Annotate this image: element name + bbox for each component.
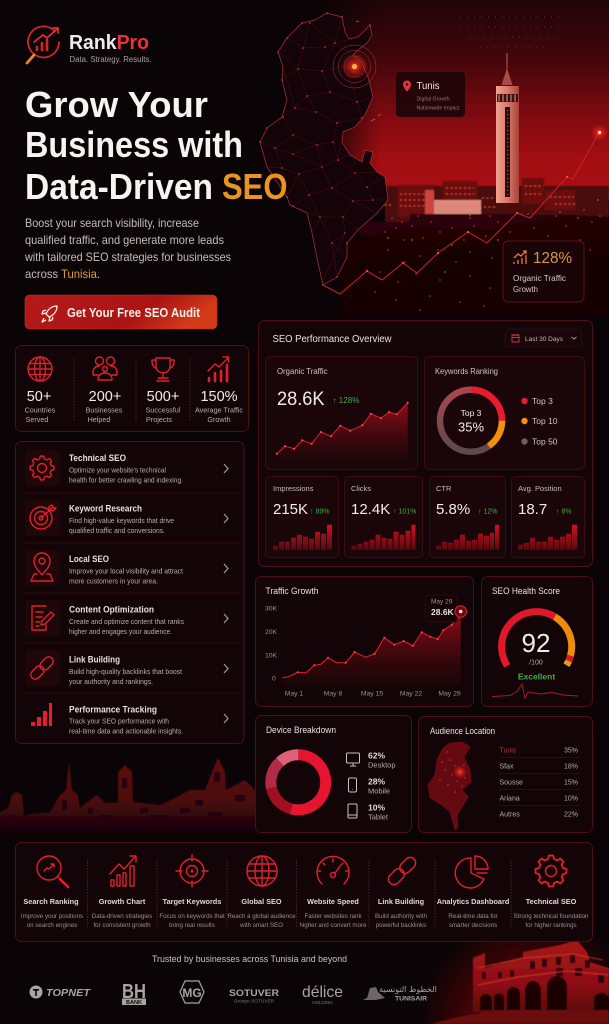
table: cities <box>499 748 579 818</box>
date range dropdown: Last 30 Days <box>525 336 564 343</box>
card: organic traffic: 28.6K <box>277 389 325 410</box>
logo: Tunisair: TUNISAIR <box>395 996 427 1002</box>
table: cities: Autres <box>500 812 520 818</box>
service: Content Optimization <box>25 600 228 636</box>
stat: countries served: Served <box>26 415 48 424</box>
intro paragraph: across Tunisia. <box>25 267 100 281</box>
stat: businesses helped: Businesses <box>86 406 123 414</box>
card: organic traffic <box>266 356 418 470</box>
callout: 128% organic traffic growth: Organic Traffic <box>513 274 566 283</box>
item: technical SEO: for higher rankings <box>525 922 577 929</box>
panel: SEO health score: Excellent <box>518 672 555 682</box>
logo: MG: MG <box>182 986 202 1000</box>
stat: average traffic growth: 150% <box>200 389 238 405</box>
card: keywords ranking: Top 3 <box>461 408 482 418</box>
item: global SEO: with smart SEO <box>239 922 283 929</box>
pulse line <box>492 684 578 698</box>
callout: Tunis: Nationwide Impact <box>416 106 460 112</box>
marker: latest point <box>455 606 467 617</box>
table: cities: 15% <box>564 780 578 786</box>
hero image: Tunis skyline at night <box>320 0 609 320</box>
device values: 10% <box>368 802 385 812</box>
service: Keyword Research: Keyword Research <box>69 504 142 514</box>
logo: Data. Strategy. Results. <box>70 55 152 64</box>
item: website speed <box>299 856 367 929</box>
logo: délice: délice <box>302 984 343 1001</box>
legend: keywords <box>521 396 558 446</box>
table: cities: Sousse <box>500 780 523 786</box>
card: impressions: ↑ 89% <box>310 508 329 516</box>
item: website speed: Website Speed <box>307 897 359 906</box>
item: technical SEO: Strong technical foundation <box>514 913 589 920</box>
device values: 28% <box>368 776 385 786</box>
callout: 128% organic traffic growth <box>503 241 584 302</box>
legend: keywords: Top 50 <box>532 436 558 446</box>
button: Get Your Free SEO Audit: Get Your Free SEO Audit <box>67 306 201 320</box>
table: cities: Tunis <box>500 748 517 754</box>
axis labels: 20K <box>265 629 278 636</box>
item: growth chart <box>92 856 152 929</box>
service: Link Building: your authority and rankings. <box>69 677 153 686</box>
item: website speed: Faster websites rank <box>304 913 362 920</box>
item: search ranking: on search engines <box>27 922 77 929</box>
card: clicks: ↑ 101% <box>393 508 416 516</box>
stat: successful projects: Projects <box>146 415 172 424</box>
axis labels: May 22 <box>400 690 422 698</box>
card: keywords ranking: 35% <box>458 420 484 434</box>
stat: average traffic growth: Average Traffic <box>195 406 243 414</box>
stat: countries served: Countries <box>25 406 56 414</box>
service: Technical SEO <box>25 450 228 486</box>
item: analytics dashboard: Analytics Dashboard <box>437 897 509 906</box>
card: impressions: Impressions <box>273 484 314 493</box>
item: link building: Link Building <box>378 897 424 906</box>
item: analytics dashboard: smarter decisions <box>449 922 497 929</box>
card: CTR <box>430 476 506 558</box>
card: CTR: CTR <box>436 484 452 493</box>
panel: SEO capabilities strip <box>16 842 592 942</box>
item: technical SEO: Technical SEO <box>526 897 577 906</box>
panel: SEO performance overview: SEO Performance Overview <box>272 334 392 345</box>
axis labels: May 29 <box>438 690 461 698</box>
item: analytics dashboard <box>437 856 509 929</box>
item: analytics dashboard: Real-time data for <box>448 913 498 920</box>
callout: 128% organic traffic growth: Growth <box>513 285 538 294</box>
panel: SEO health score: SEO Health Score <box>492 586 560 597</box>
item: link building <box>375 855 428 929</box>
date range dropdown <box>505 329 582 347</box>
logo: TOPNET <box>30 986 92 999</box>
Tunis location beacon <box>333 45 376 88</box>
card: keywords ranking <box>424 356 584 470</box>
service: Content Optimization: higher and engages your audience. <box>69 627 172 636</box>
table: cities: 35% <box>564 748 578 754</box>
card: clicks: 12.4K <box>351 501 390 518</box>
panel: key stats <box>16 346 248 432</box>
table: cities: 18% <box>564 764 578 770</box>
service: Local SEO: Improve your local visibility and attract <box>69 566 183 576</box>
logo: SOTUVER <box>229 988 279 1004</box>
stat: successful projects <box>146 358 181 424</box>
service: Performance Tracking <box>31 703 228 736</box>
growth line across the city <box>323 124 608 294</box>
axis labels: May 8 <box>324 690 342 698</box>
donut chart: devices <box>271 755 326 810</box>
panel: SEO performance overview <box>258 320 592 566</box>
service: Keyword Research: Find high-value keywords that drive <box>69 516 174 525</box>
service: Local SEO <box>25 550 228 586</box>
card: organic traffic: Organic Traffic <box>277 366 328 376</box>
item: link building: powerful backlinks <box>376 922 426 929</box>
panel: audience location <box>418 716 592 832</box>
intro paragraph: with tailored SEO strategies for businesses <box>24 250 231 264</box>
item: website speed: higher and convert more <box>299 922 367 929</box>
service: Content Optimization: Create and optimize content that ranks <box>69 617 184 626</box>
icons: devices <box>346 753 360 818</box>
stat: businesses helped: Helped <box>88 415 110 424</box>
service: Performance Tracking: real-time data and actionable insights. <box>69 726 183 736</box>
card: average position: ↑ 8% <box>556 508 572 516</box>
card: keywords ranking: Keywords Ranking <box>435 366 498 376</box>
service: Technical SEO: Optimize your website's technical <box>69 466 166 474</box>
title: SEO <box>222 166 288 207</box>
logo: TOPNET: TOPNET <box>46 987 92 999</box>
decorative: old town silhouette <box>0 758 255 836</box>
city lights <box>375 210 600 310</box>
card: impressions: 215K <box>273 501 308 518</box>
item: link building: Build authority with <box>375 913 428 920</box>
card: organic traffic: ↑ 128% <box>332 396 360 405</box>
service: Local SEO: Local SEO <box>69 554 109 565</box>
item: search ranking <box>21 856 83 929</box>
stat: businesses helped: 200+ <box>89 389 121 405</box>
axis labels: May 1 <box>285 690 303 698</box>
gauge <box>502 612 572 666</box>
service: Link Building: Build high-quality backlinks that boost <box>69 667 182 676</box>
device values: Mobile <box>368 786 390 796</box>
panel: traffic growth: Traffic Growth <box>266 586 318 597</box>
logo: MG <box>180 981 204 1003</box>
stat: average traffic growth: Growth <box>207 415 231 424</box>
item: search ranking: Improve your positions <box>21 913 83 920</box>
button: Get Your Free SEO Audit <box>25 295 217 329</box>
item: global SEO: Reach a global audience <box>227 913 296 920</box>
table: cities: Sfax <box>500 764 514 770</box>
item: technical SEO <box>514 856 589 929</box>
area chart: organic traffic <box>277 403 408 458</box>
donut chart: keywords <box>440 390 502 452</box>
card: average position: 18.7 <box>518 501 547 518</box>
panel: SEO health score: /100 <box>529 660 543 666</box>
service: Performance Tracking: Performance Tracking <box>69 704 157 716</box>
icon: magnifier with growth bars <box>27 26 59 63</box>
logo: RankPro <box>69 32 149 54</box>
service: Technical SEO: health for better crawling and indexing. <box>69 476 183 484</box>
axis labels: 10K <box>265 652 278 660</box>
title: Business with <box>25 124 243 165</box>
stat: successful projects: 500+ <box>147 389 179 405</box>
card: impressions <box>266 476 338 558</box>
service: Link Building <box>25 650 228 686</box>
panel: device breakdown <box>256 716 412 832</box>
skyline buildings <box>385 186 609 240</box>
stat: businesses helped <box>86 357 123 424</box>
stat: successful projects: Successful <box>146 406 181 414</box>
title: Grow Your <box>25 84 208 125</box>
tooltip: May 29 <box>425 595 457 622</box>
device values <box>368 750 396 822</box>
device values: Tablet <box>368 812 389 822</box>
panel: traffic growth <box>256 576 474 706</box>
table: cities: 10% <box>564 796 578 802</box>
card: average position <box>512 476 584 558</box>
callout: Tunis: Digital Growth <box>416 96 450 102</box>
item: global SEO <box>227 856 296 929</box>
axis labels: 30K <box>265 606 278 612</box>
callout: 128% organic traffic growth: 128% <box>533 250 572 267</box>
panel: services <box>16 442 244 744</box>
item: growth chart: Growth Chart <box>99 897 146 906</box>
logo: SOTUVER: SOTUVER <box>229 988 279 999</box>
item: target keywords: Target Keywords <box>163 897 221 906</box>
item: target keywords: bring real results <box>169 922 215 929</box>
item: global SEO: Global SEO <box>241 897 282 906</box>
panel: device breakdown: Device Breakdown <box>266 725 336 736</box>
logo: Tunisair <box>363 985 437 1002</box>
legend: keywords: Top 10 <box>532 416 558 426</box>
logo: BH Bank: BH <box>122 981 146 1003</box>
card: clicks: Clicks <box>351 484 371 493</box>
map: Tunisia network <box>260 13 388 285</box>
service: Technical SEO: Technical SEO <box>69 453 126 464</box>
tower <box>496 53 519 203</box>
logo <box>27 26 152 64</box>
table: cities: Ariana <box>500 796 520 802</box>
callout: Tunis: Tunis <box>416 80 440 92</box>
panel: SEO health score <box>482 576 592 706</box>
item: growth chart: Data-driven strategies <box>92 913 152 920</box>
stat: countries served: 50+ <box>27 389 51 405</box>
card: average position: Avg. Position <box>518 484 562 493</box>
tooltip: May 29: May 29 <box>431 598 453 606</box>
device values: 62% <box>368 750 385 760</box>
item: growth chart: for consistent growth <box>93 922 151 929</box>
trusted by heading: Trusted by businesses across Tunisia and beyond <box>152 954 347 965</box>
stat: countries served <box>25 357 56 424</box>
logo: BH Bank: BANK <box>126 1000 142 1006</box>
service: Keyword Research <box>25 500 228 536</box>
panel: SEO health score: 92 <box>522 628 550 658</box>
card: CTR: ↑ 12% <box>478 508 497 516</box>
service: Content Optimization: Content Optimization <box>69 604 154 616</box>
service: Performance Tracking: Track your SEO performance with <box>69 716 169 726</box>
decorative: amphitheatre of El Jem <box>420 940 609 1024</box>
logo: délice: HOLDING <box>312 1000 333 1005</box>
legend: keywords: Top 3 <box>532 396 553 406</box>
table: cities: 22% <box>564 812 578 818</box>
title: Data-Driven <box>25 166 213 207</box>
axis labels: 0 <box>272 676 276 682</box>
axis labels: May 15 <box>361 690 383 698</box>
stat: average traffic growth <box>195 357 243 424</box>
map: Tunisia audience density <box>428 742 471 830</box>
service: Link Building: Link Building <box>69 654 120 666</box>
service: Local SEO: more customers in your area. <box>69 576 158 586</box>
card: CTR: 5.8% <box>436 501 470 518</box>
area chart: traffic growth <box>282 611 461 684</box>
intro paragraph: Boost your search visibility, increase <box>25 216 199 230</box>
item: target keywords <box>159 855 225 929</box>
title <box>25 84 288 207</box>
intro paragraph <box>24 216 231 281</box>
card: clicks <box>344 476 422 558</box>
item: search ranking: Search Ranking <box>23 897 79 906</box>
device values: Desktop <box>368 760 396 770</box>
callout: Tunis <box>396 72 465 117</box>
panel: audience location: Audience Location <box>430 726 495 737</box>
icon: rocket <box>42 306 57 322</box>
logo: Tunisair: الخطوط التونسية <box>379 985 437 994</box>
service: Keyword Research: qualified traffic and conversions. <box>69 526 165 535</box>
tooltip: May 29: 28.6K <box>431 607 455 617</box>
axis labels <box>265 606 461 698</box>
logo: SOTUVER: Groupe SOTUVER <box>234 998 275 1004</box>
icon: location pin <box>403 80 411 92</box>
item: target keywords: Focus on keywords that <box>159 913 225 920</box>
icon: small growth chart <box>514 251 526 264</box>
intro paragraph: qualified traffic, and generate more leads <box>25 233 224 247</box>
